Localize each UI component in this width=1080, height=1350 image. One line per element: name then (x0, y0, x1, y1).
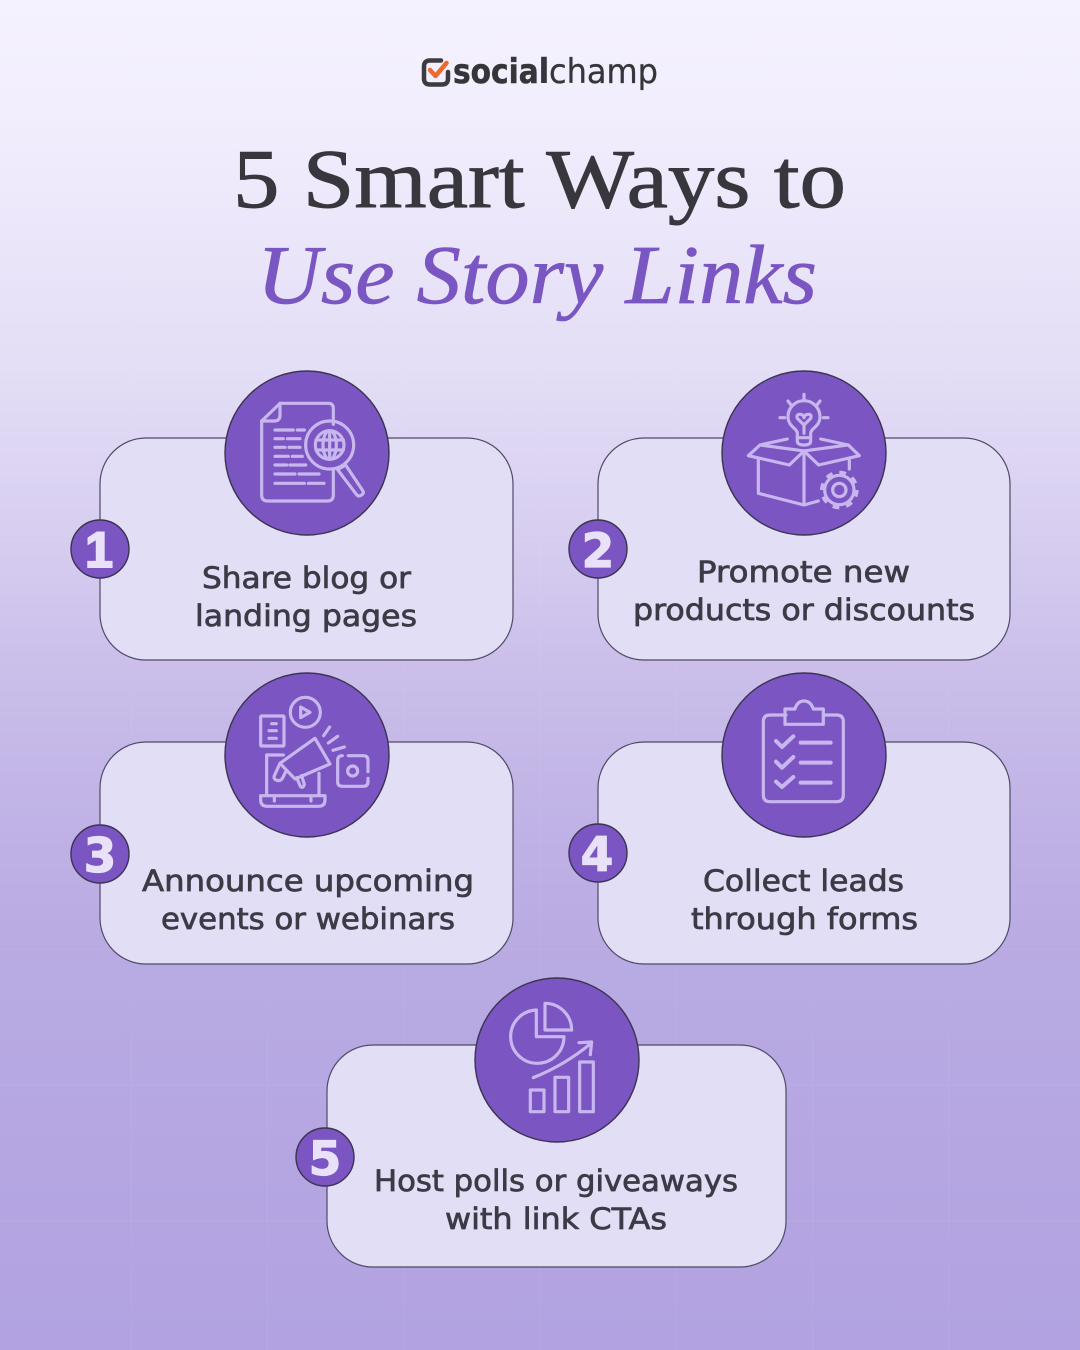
logo: socialchamp (424, 52, 658, 92)
icon disc 1 (225, 371, 389, 535)
number badge 5 (296, 1128, 354, 1187)
logo wordmark: social (453, 52, 549, 92)
icon: pie chart and rising bars (511, 1003, 593, 1112)
number badge 3: 3 (84, 829, 116, 884)
card 1 text: landing pages (195, 599, 417, 633)
card 3 text: Announce upcoming (142, 864, 474, 898)
title line 1: 5 Smart Ways to (233, 133, 846, 226)
icon: logo checkbox (424, 60, 448, 84)
panel: card 5 host polls (296, 978, 786, 1267)
icon: document with magnifier and globe (262, 403, 363, 501)
title line 2: Use Story Links (257, 229, 817, 322)
icon: megaphone on laptop with media (261, 697, 368, 806)
panel: card 4 collect leads (569, 673, 1010, 964)
card 4 text: Collect leads (703, 864, 904, 898)
number badge 2: 2 (582, 524, 614, 579)
card 1 text (195, 561, 417, 633)
logo wordmark (453, 52, 658, 92)
number badge 1: 1 (85, 522, 113, 578)
card 5 text: with link CTAs (445, 1202, 667, 1236)
panel: card 2 promote products (569, 371, 1010, 660)
card 2 text: products or discounts (633, 593, 975, 627)
card 3 text: events or webinars (161, 902, 455, 936)
card 2 text: Promote new (697, 555, 910, 589)
card 2 text (633, 555, 975, 627)
icon disc 4 (722, 673, 886, 837)
number badge 3 (71, 825, 129, 884)
card 4 text: through forms (691, 902, 918, 936)
title (233, 133, 846, 322)
icon disc 2 (722, 371, 886, 535)
icon disc 3 (225, 673, 389, 837)
card 1 text: Share blog or (202, 561, 411, 595)
number badge 4: 4 (581, 828, 613, 883)
card 5 text (374, 1164, 738, 1236)
icon: box with light bulb and gear (748, 394, 859, 507)
number badge 4 (569, 824, 627, 883)
panel: card 1 share blog (71, 371, 513, 660)
icon: clipboard checklist (763, 701, 843, 802)
number badge 1 (71, 520, 129, 578)
card 4 text (691, 864, 918, 936)
card 3 text (142, 864, 474, 936)
logo wordmark: champ (549, 52, 658, 92)
panel: card 3 announce events (71, 673, 513, 964)
card 5 text: Host polls or giveaways (374, 1164, 738, 1198)
icon disc 5 (475, 978, 639, 1142)
number badge 2 (569, 520, 627, 579)
number badge 5: 5 (309, 1132, 341, 1187)
